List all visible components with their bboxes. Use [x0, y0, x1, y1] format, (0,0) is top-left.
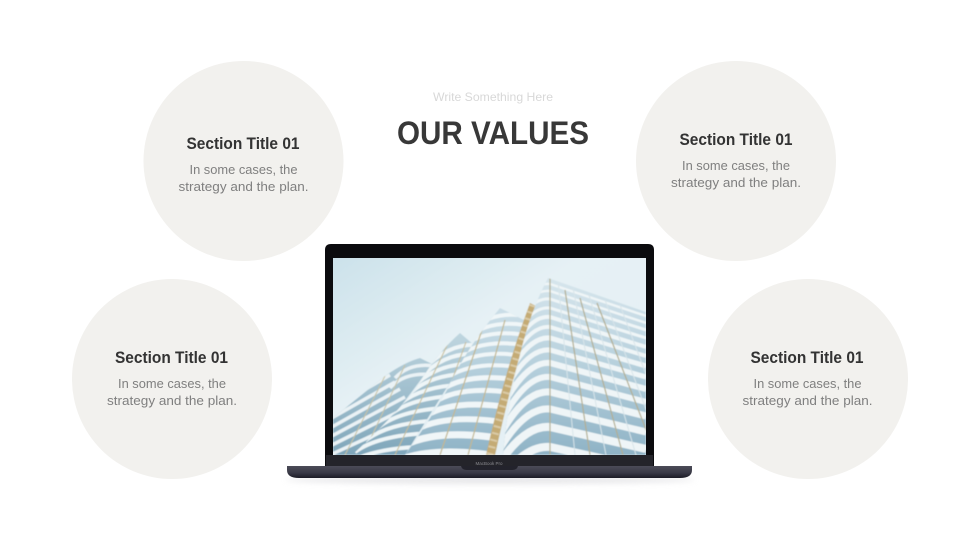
heading: section title bottom left: Section Title 01	[115, 349, 228, 367]
text block: bottom left description: In some cases, the	[118, 376, 226, 391]
panel: bottom right value	[708, 279, 908, 479]
laptop base	[287, 466, 692, 478]
text block: top right description: In some cases, the	[682, 158, 790, 173]
laptop mockup	[285, 244, 695, 490]
text block: top left description: strategy and the plan.	[178, 179, 308, 194]
heading: section title top right: Section Title 01	[680, 131, 792, 149]
main tower	[503, 278, 646, 455]
model label: MacBook Pro	[475, 461, 503, 466]
text block: top right description: strategy and the plan.	[671, 175, 801, 190]
heading: section title bottom right: Section Title 01	[750, 349, 864, 367]
infographic canvas	[72, 61, 908, 485]
text block: bottom left description: strategy and the plan.	[107, 393, 237, 408]
panel: top left value	[144, 61, 344, 261]
subtitle: Write Something Here	[433, 90, 553, 104]
screen photo: glass skyscraper	[333, 258, 646, 455]
heading: section title top left: Section Title 01	[186, 135, 300, 153]
title: OUR VALUES	[397, 115, 589, 151]
second tower	[406, 308, 524, 455]
panel: top right value	[636, 61, 836, 261]
gold column	[486, 303, 536, 455]
third tower	[354, 333, 471, 455]
text block: bottom right description: strategy and the plan.	[742, 393, 872, 408]
text block: bottom right description: In some cases, the	[754, 376, 862, 391]
trackpad notch	[461, 466, 518, 470]
fourth and fifth towers	[333, 358, 431, 455]
laptop lid	[325, 244, 654, 466]
text block: top left description: In some cases, the	[190, 162, 298, 177]
panel: bottom left value	[72, 279, 272, 479]
